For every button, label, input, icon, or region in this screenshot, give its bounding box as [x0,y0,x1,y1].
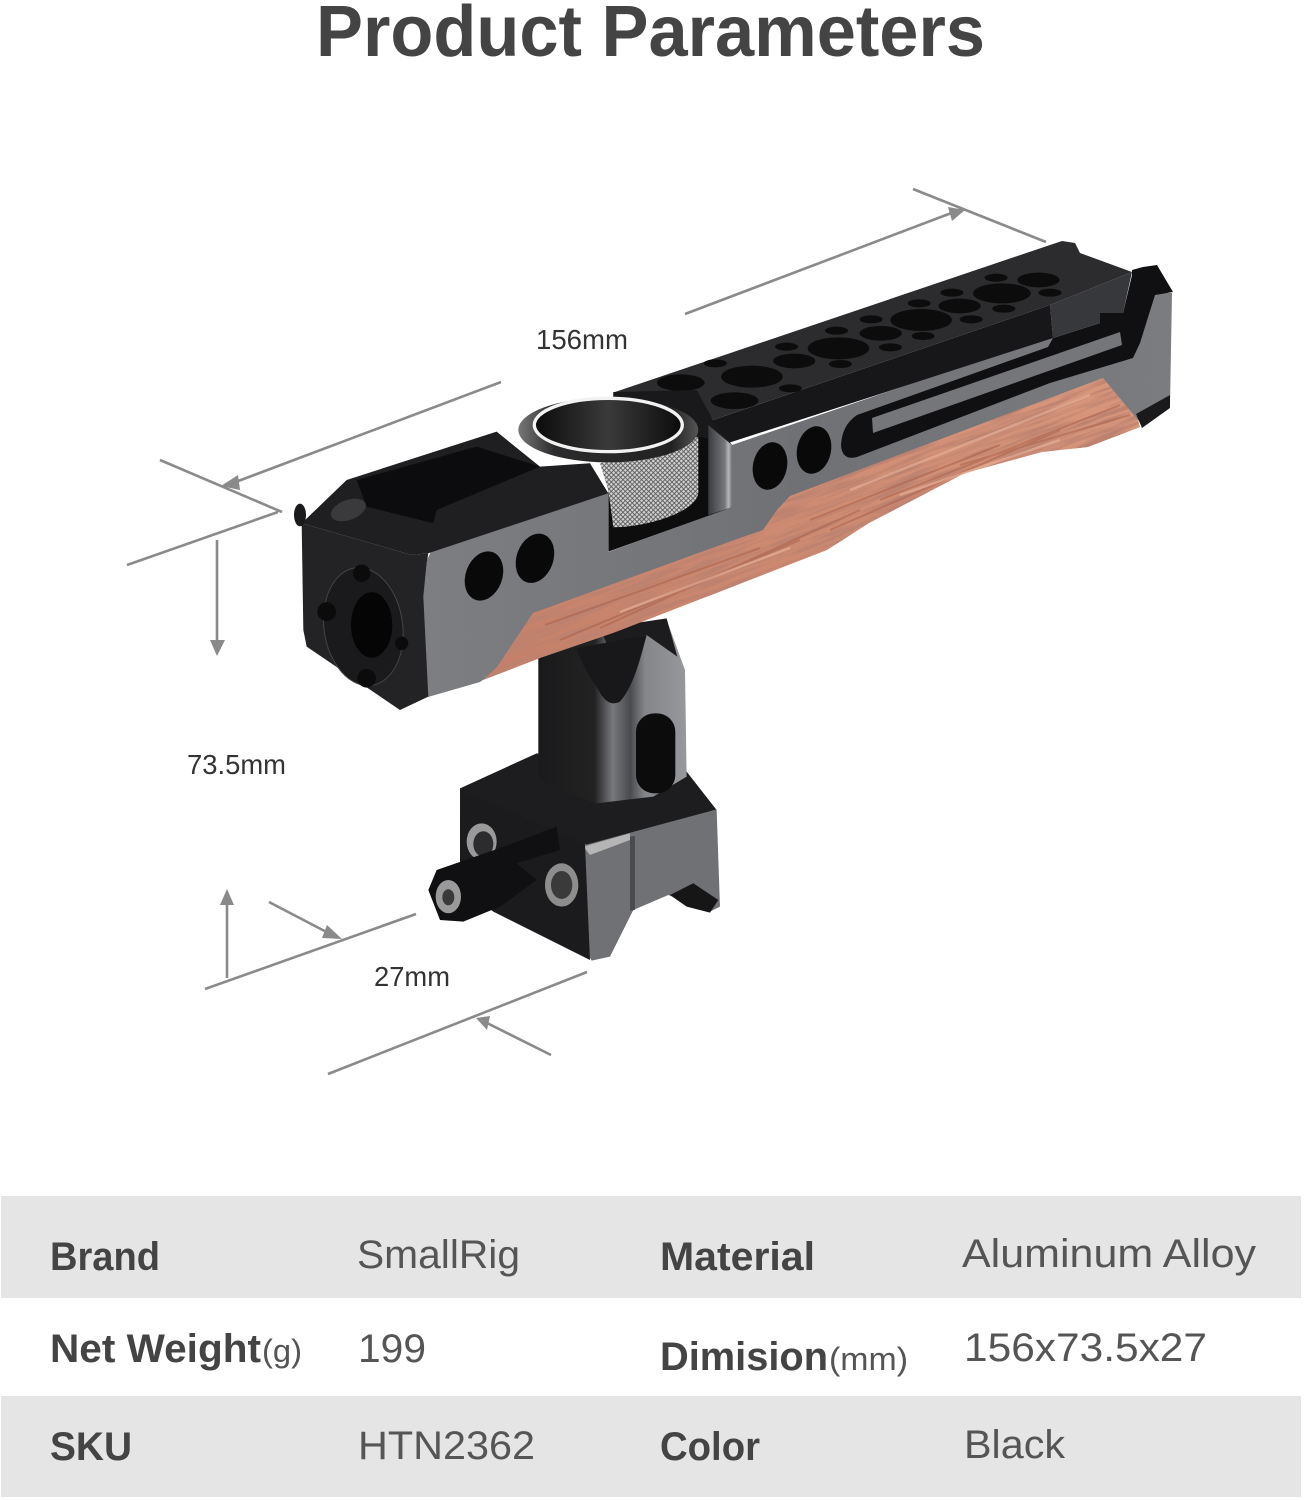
row: net weight and dimension: 199 [358,1327,426,1371]
front mount ring [316,562,411,691]
front pin [294,504,306,526]
rear section [615,241,1173,493]
spec table [1,1196,1301,1497]
row: brand and material: Aluminum Alloy [962,1232,1256,1276]
label: 27mm: 27mm [374,961,450,992]
lever [428,827,560,922]
clamp dark front [460,790,590,960]
front face [302,523,428,710]
row: net weight and dimension: (mm) [829,1341,908,1377]
dimension: 156mm length arrows [127,189,1046,565]
row: net weight and dimension: Net Weight [50,1327,261,1371]
knob top [518,398,698,462]
clamp top plate [460,753,717,845]
knurled cylinder [600,437,698,527]
label: 73.5mm: 73.5mm [187,749,286,780]
row: sku and color [50,1423,1066,1469]
cold shoe recess [357,447,540,523]
row: brand and material: SmallRig [357,1233,520,1277]
dovetail foot [670,883,718,913]
rod clamp knob [518,390,732,552]
post oval slot [636,713,675,793]
row: brand and material [50,1232,1256,1279]
row: sku and color: Black [964,1423,1066,1467]
row: net weight and dimension [50,1326,1207,1379]
dimension: 73.5mm height arrows [210,540,234,978]
end recess [1050,272,1132,338]
table band 1 [1,1196,1301,1298]
top plate face [615,241,1132,420]
label: 156mm: 156mm [536,324,628,355]
dimension: 27mm width arrows [205,902,587,1074]
mount lobes [317,565,408,688]
clamp grey side [585,809,720,961]
top plate front [302,432,608,555]
side slot and end cap black [841,265,1173,458]
notch column [708,425,732,515]
post dark top [600,618,677,657]
row: brand and material: Brand [50,1235,160,1279]
dark fill behind knob [610,390,732,530]
row: net weight and dimension: Dimision [660,1335,828,1379]
top plate front edge [713,305,1053,445]
notch shadow [608,437,732,552]
handle side body [423,293,1172,697]
row: brand and material: Material [660,1235,815,1279]
screw right [545,863,578,907]
slot rail [872,332,1122,433]
row: sku and color: Color [660,1425,760,1469]
top plate holes [657,273,1062,409]
table band 3 [1,1396,1301,1497]
post [538,620,687,803]
post black facet [577,635,647,703]
wooden grip [483,378,1140,680]
row: sku and color: SKU [50,1425,132,1469]
product: top handle [294,241,1173,961]
row: net weight and dimension: 156x73.5x27 [964,1326,1207,1370]
screw left [467,823,497,860]
side holes [458,528,561,606]
row: net weight and dimension: (g) [262,1333,302,1369]
white rim [534,398,682,452]
front block [294,432,608,710]
side holes [748,423,836,493]
mount post and clamp base [428,618,720,961]
front bore [351,592,392,658]
row: sku and color: HTN2362 [358,1424,535,1468]
shoe detent [328,494,369,526]
end bottom corner [1136,395,1170,428]
